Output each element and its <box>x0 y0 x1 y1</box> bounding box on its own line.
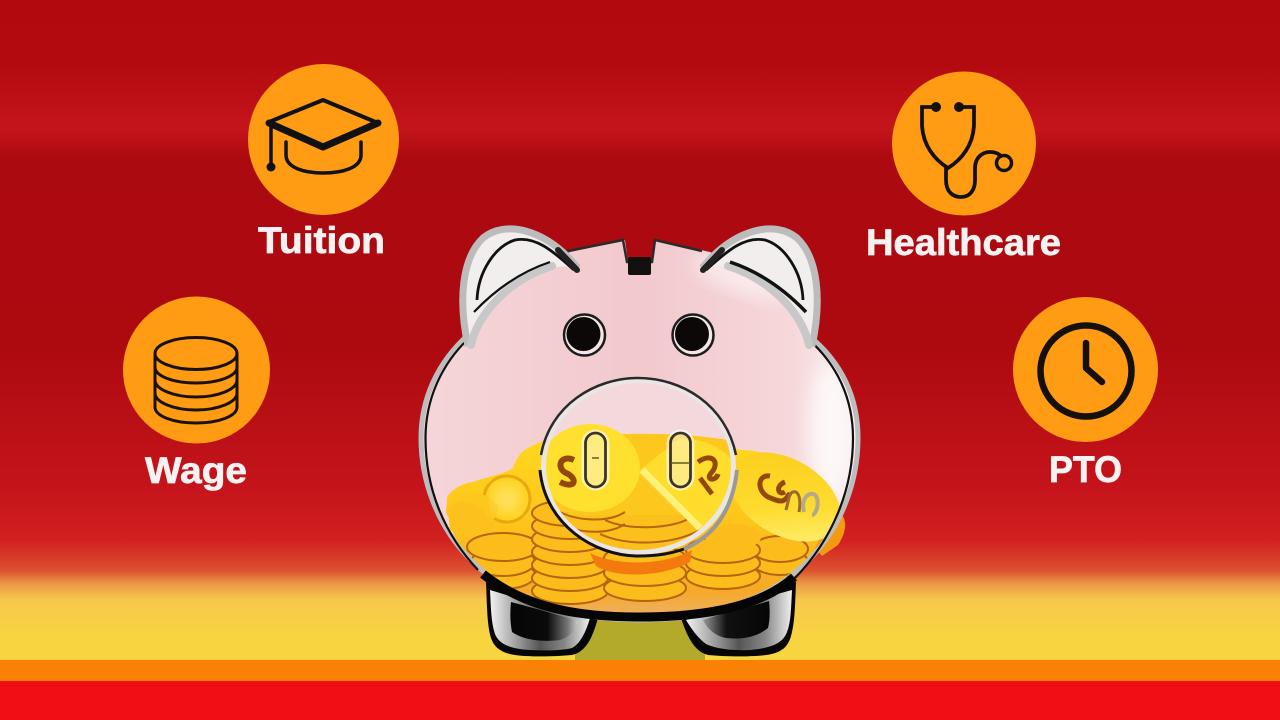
coin slot <box>628 257 651 275</box>
body highlight <box>688 248 852 500</box>
ground shadow <box>575 612 705 660</box>
tilted coin right <box>714 434 856 560</box>
right eye <box>672 314 714 356</box>
snout glass <box>542 378 736 554</box>
healthcare item <box>866 72 1061 263</box>
tuition item <box>248 64 399 261</box>
icon: stethoscope <box>922 102 1012 197</box>
wage item <box>123 296 270 491</box>
coin outside glass <box>815 510 845 556</box>
pto item <box>1013 297 1158 490</box>
icon: graduation cap <box>266 100 378 173</box>
coin highlight <box>496 488 518 510</box>
left foot <box>486 582 598 656</box>
label: Healthcare: Healthcare <box>866 222 1061 263</box>
right ear <box>702 229 818 346</box>
orange coin crescent <box>590 550 692 575</box>
snout coins <box>546 424 731 550</box>
coin mass <box>446 441 820 612</box>
label: Wage: Wage <box>145 450 247 491</box>
body outline <box>421 240 858 620</box>
piggy bank <box>421 229 858 660</box>
icon: clock <box>1040 326 1132 416</box>
label: PTO: PTO <box>1049 449 1122 490</box>
coins inside body <box>446 441 820 612</box>
icon: coin stack <box>155 338 237 423</box>
label: Tuition: Tuition <box>258 220 385 261</box>
right foot <box>681 582 796 656</box>
pto circle <box>1013 297 1158 442</box>
coin lump <box>484 476 530 522</box>
left eye <box>564 314 605 356</box>
snout rim <box>544 380 734 552</box>
right nostril <box>669 432 692 488</box>
tuition circle <box>248 64 399 215</box>
left ear <box>462 229 578 346</box>
coin stacks <box>446 493 808 604</box>
left nostril <box>584 432 607 488</box>
healthcare circle <box>892 72 1036 216</box>
glass body <box>421 240 858 620</box>
snout <box>530 378 750 560</box>
wage circle <box>123 296 270 444</box>
